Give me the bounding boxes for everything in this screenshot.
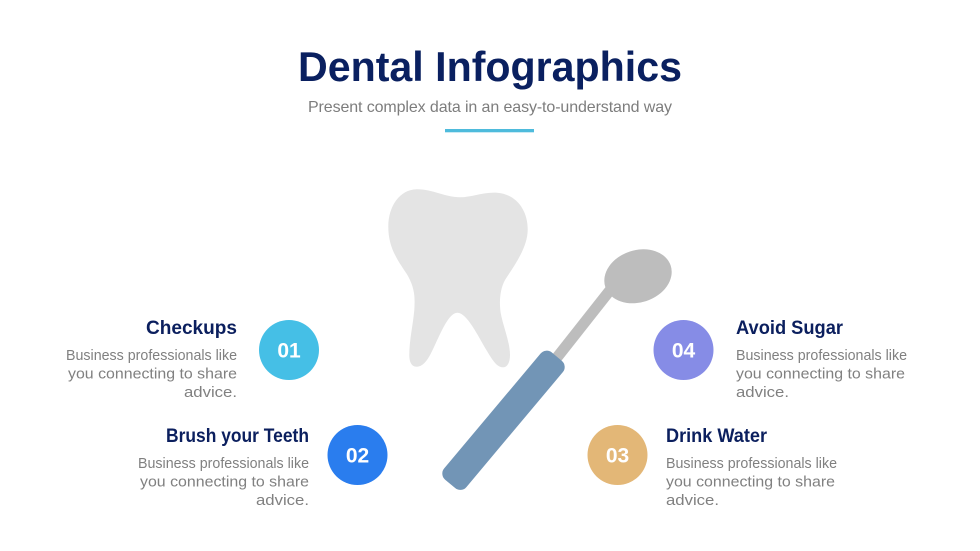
heading: Avoid Sugar (736, 317, 843, 339)
heading: Drink Water (666, 425, 767, 447)
item 03: drink water (588, 425, 837, 509)
description: you connecting to share (140, 474, 309, 490)
icon: dental mirror (439, 241, 679, 493)
item 02: brush your teeth (138, 425, 388, 509)
description: Business professionals like (736, 347, 907, 364)
description (66, 347, 237, 401)
description (736, 347, 907, 401)
mirror handle (439, 347, 568, 493)
description: you connecting to share (736, 366, 905, 382)
title underline (445, 129, 534, 132)
description: advice. (736, 384, 789, 401)
description (666, 455, 837, 509)
mirror shaft (555, 289, 611, 360)
number badge 02 (328, 425, 388, 485)
number badge 02: 02 (346, 444, 369, 468)
subtitle: Present complex data in an easy-to-understand way (308, 99, 672, 116)
heading: Brush your Teeth (166, 425, 309, 447)
number badge 01 (259, 320, 319, 380)
description: Business professionals like (138, 455, 309, 472)
item 04: avoid sugar (654, 317, 907, 401)
item 01: checkups (66, 317, 319, 401)
description: advice. (256, 492, 309, 509)
description: advice. (666, 492, 719, 509)
number badge 03: 03 (606, 444, 629, 468)
description: advice. (184, 384, 237, 401)
description: Business professionals like (66, 347, 237, 364)
description (138, 455, 309, 509)
description: you connecting to share (666, 474, 835, 490)
number badge 04: 04 (672, 340, 695, 362)
number badge 01: 01 (277, 340, 301, 362)
title: Dental Infographics (298, 43, 682, 90)
number badge 03 (588, 425, 648, 485)
description: you connecting to share (68, 366, 237, 382)
number badge 04 (654, 320, 714, 380)
heading: Checkups (146, 317, 237, 339)
description: Business professionals like (666, 455, 837, 472)
mirror head (597, 241, 679, 312)
icon: tooth (388, 189, 528, 367)
